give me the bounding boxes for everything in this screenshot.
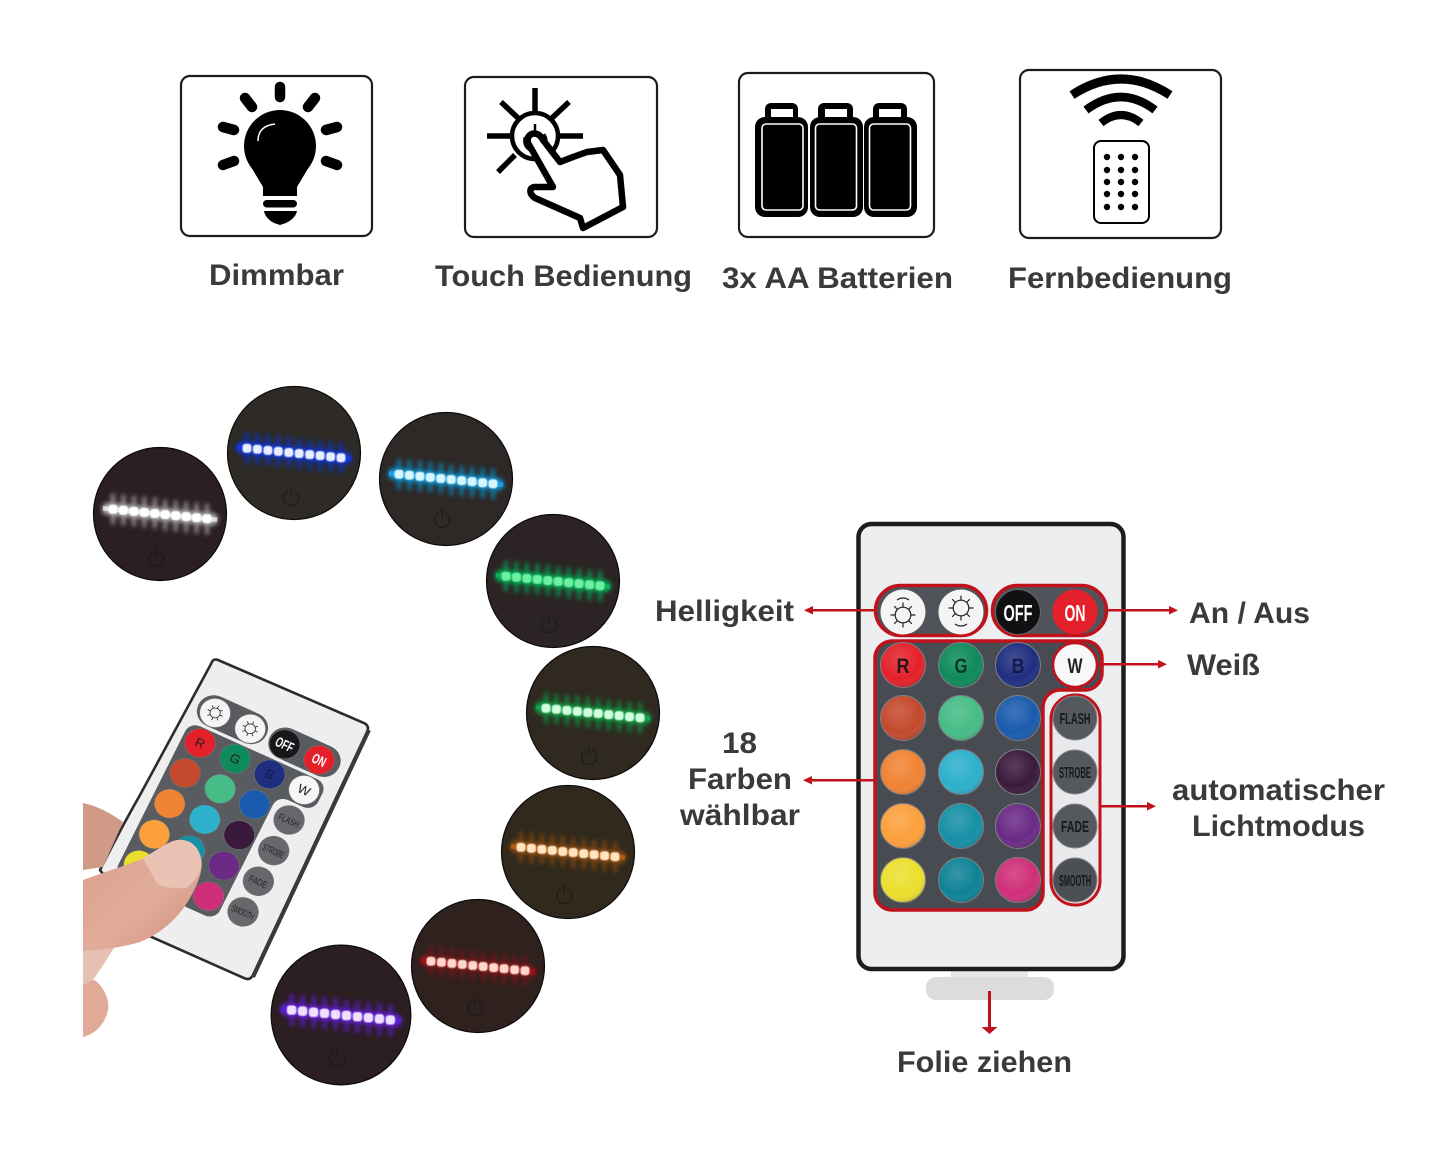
panel: 3x AA Batterien [722,73,953,295]
label: Dimmbar: Dimmbar [209,259,344,292]
group: brightness buttons [876,586,986,636]
group: colour buttons: G [954,655,968,678]
icon: remote control [1094,141,1149,223]
tilted remote buttons: B [262,766,277,783]
icon: three batteries [755,103,917,217]
label: Helligkeit: Helligkeit [655,595,794,628]
button: white [1053,643,1097,687]
tilted remote buttons: STROBE [260,842,286,861]
icon frame: Touch [465,77,657,237]
infographic canvas [83,68,1385,1086]
pull tab [926,970,1054,1000]
group: mode buttons: FADE [1061,819,1089,836]
disc: light green light [526,646,660,780]
tilted remote buttons: FLASH [276,812,301,831]
group: colour buttons [875,641,1102,910]
label: Folie ziehen: Folie ziehen [897,1046,1072,1079]
panel: Fernbedienung [1008,70,1232,295]
icon: light bulb [223,87,337,225]
label: automatischer Lichtmodus: automatischer [1172,774,1385,807]
arrow: Weiß [1097,660,1167,668]
label: 18 Farben wählbar [679,727,800,832]
label: Touch Bedienung: Touch Bedienung [435,260,692,293]
photo: remote held in hand [83,660,369,1037]
icon frame: Batterien [739,73,934,237]
icon: wifi signal [1072,79,1170,123]
label: 18 Farben wählbar: Farben [688,763,792,796]
tilted remote buttons: ON [309,751,328,771]
arrow: An / Aus [1106,606,1178,614]
tilted remote buttons [114,690,346,938]
arrow: Folie ziehen [982,991,998,1034]
tilted remote buttons: FADE [247,874,269,891]
disc: green light [486,514,620,648]
panel: Touch Bedienung [435,77,692,293]
icon: touching hand [487,88,623,228]
disc: white light [94,448,226,580]
group: mode buttons [1051,695,1100,905]
label: 18 Farben wählbar: 18 [722,727,757,760]
tilted remote buttons: OFF [272,735,296,756]
label: An / Aus: An / Aus [1189,597,1310,630]
icon frame: Fernbedienung [1020,70,1221,238]
group: on off buttons [992,586,1106,636]
disc: cyan light [380,412,512,546]
label: Fernbedienung: Fernbedienung [1008,262,1232,295]
arrow: Helligkeit [804,606,875,614]
icon frame: Dimmbar [181,76,372,236]
panel: annotated remote control [858,524,1124,1000]
group: colour buttons: B [1012,655,1024,678]
label: 3x AA Batterien: 3x AA Batterien [722,262,953,295]
group: mode buttons: STROBE [1059,765,1091,782]
label: Weiß: Weiß [1187,649,1260,682]
group: mode buttons: FLASH [1060,711,1090,728]
disc: orange light [502,786,634,918]
tilted remote buttons: R [192,734,208,752]
group: mode buttons: SMOOTH [1059,873,1091,890]
group: on off buttons: ON [1064,600,1086,626]
hand and thumb [83,803,202,1037]
disc: purple light [271,945,411,1085]
label: automatischer Lichtmodus [1172,774,1385,843]
group: colour buttons: R [896,655,910,678]
disc: red light [412,900,544,1032]
label: 18 Farben wählbar: wählbar [679,799,800,832]
label: automatischer Lichtmodus: Lichtmodus [1192,810,1365,843]
remote body tilted [100,660,368,979]
disc: blue light [228,386,360,520]
remote body [858,524,1124,969]
tilted remote buttons: G [227,750,243,768]
panel: Dimmbar [181,76,372,292]
arrow: 18 Farben [803,776,875,784]
tilted remote buttons: SMOOTH [229,903,255,923]
tilted remote buttons: W [295,781,314,799]
button: white: W [1068,655,1083,678]
group: on off buttons: OFF [1004,600,1032,626]
arrow: automatischer Lichtmodus [1100,802,1156,810]
